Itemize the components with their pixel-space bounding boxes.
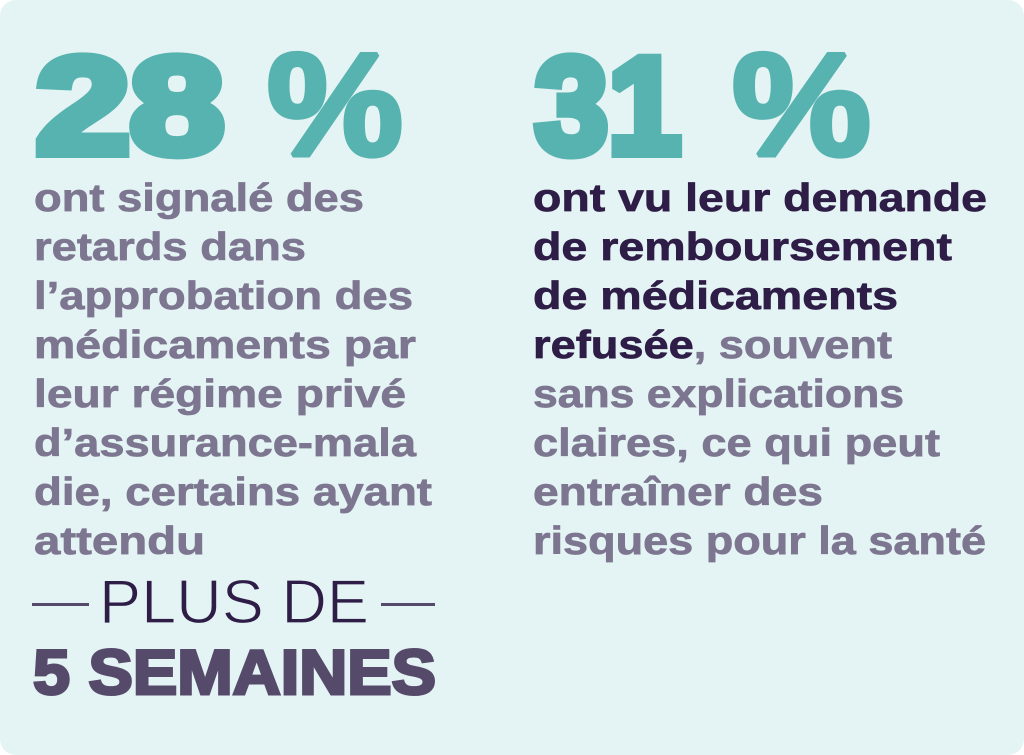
callout: plus de 5 semaines (32, 568, 436, 708)
right body text: risques pour la santé (533, 520, 986, 563)
left body text: l’approbation des (34, 275, 413, 318)
right body text (533, 177, 987, 563)
dash right (381, 603, 435, 606)
label 5 semaines: 5 SEMAINES (33, 638, 436, 708)
left body text: retards dans (34, 226, 306, 269)
right body text: entraîner des (533, 471, 823, 514)
right body text: sans explications (533, 373, 904, 416)
right body text: de médicaments (533, 275, 898, 318)
left body text: attendu (34, 520, 205, 563)
label plus de: PLUS DE (99, 568, 369, 637)
right body text: de remboursement (533, 226, 952, 269)
right body text: ont vu leur demande (533, 177, 987, 220)
panel: left statistic (32, 23, 436, 708)
big number 31 %: 31 (535, 30, 681, 183)
panel: right statistic (533, 23, 987, 563)
big number 28 %: 28 (36, 30, 224, 183)
right body text: claires, ce qui peut (533, 422, 940, 465)
big number 31 % (535, 23, 871, 186)
left body text: médicaments par (34, 324, 416, 367)
left body text (34, 177, 432, 563)
right body text: refusée , souvent (533, 324, 892, 367)
left body text: ont signalé des (34, 177, 364, 220)
left body text: d’assurance-mala (34, 422, 416, 465)
left body text: die, certains ayant (34, 471, 432, 514)
dash left (32, 603, 89, 606)
big number 28 % (36, 23, 403, 186)
big number 28 %: % (267, 23, 403, 186)
left body text: leur régime privé (34, 373, 406, 416)
big number 31 %: % (732, 23, 871, 186)
